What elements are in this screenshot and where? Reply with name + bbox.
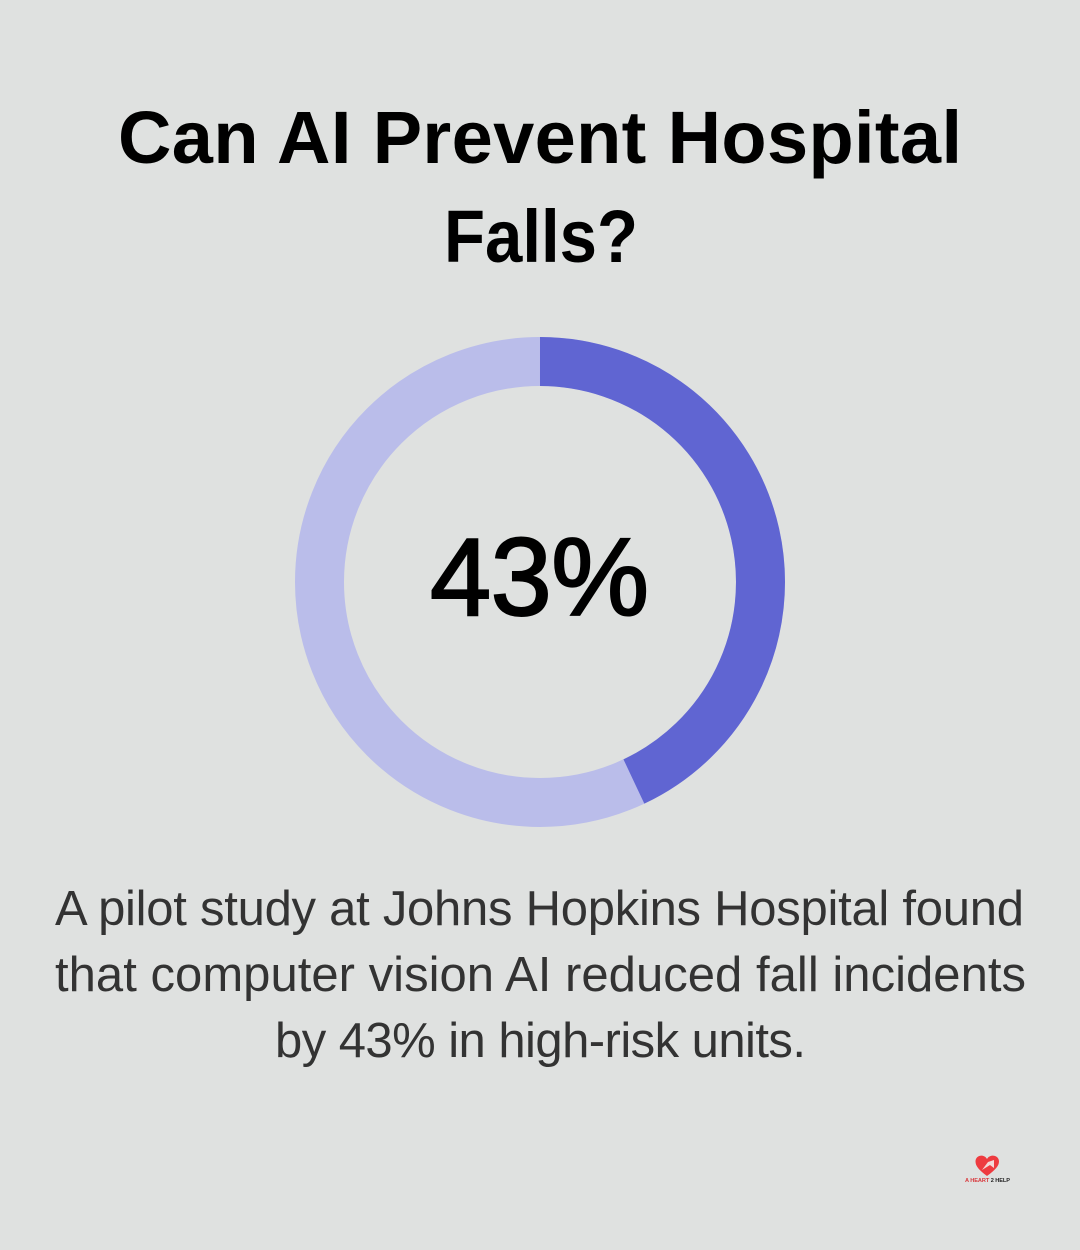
title: Falls? — [444, 195, 638, 278]
description: that computer vision AI reduced fall incidents — [55, 948, 1026, 1002]
title: Can AI Prevent Hospital — [118, 96, 962, 179]
description — [55, 882, 1026, 1068]
logo — [965, 1156, 1010, 1184]
big number: 43% — [430, 516, 649, 639]
description: A pilot study at Johns Hopkins Hospital found — [55, 882, 1024, 936]
description: by 43% in high-risk units. — [275, 1014, 806, 1068]
logo text: A HEART 2 HELP — [965, 1178, 1010, 1184]
donut chart — [320, 362, 760, 802]
icon: heart — [976, 1156, 999, 1176]
title — [118, 96, 962, 278]
